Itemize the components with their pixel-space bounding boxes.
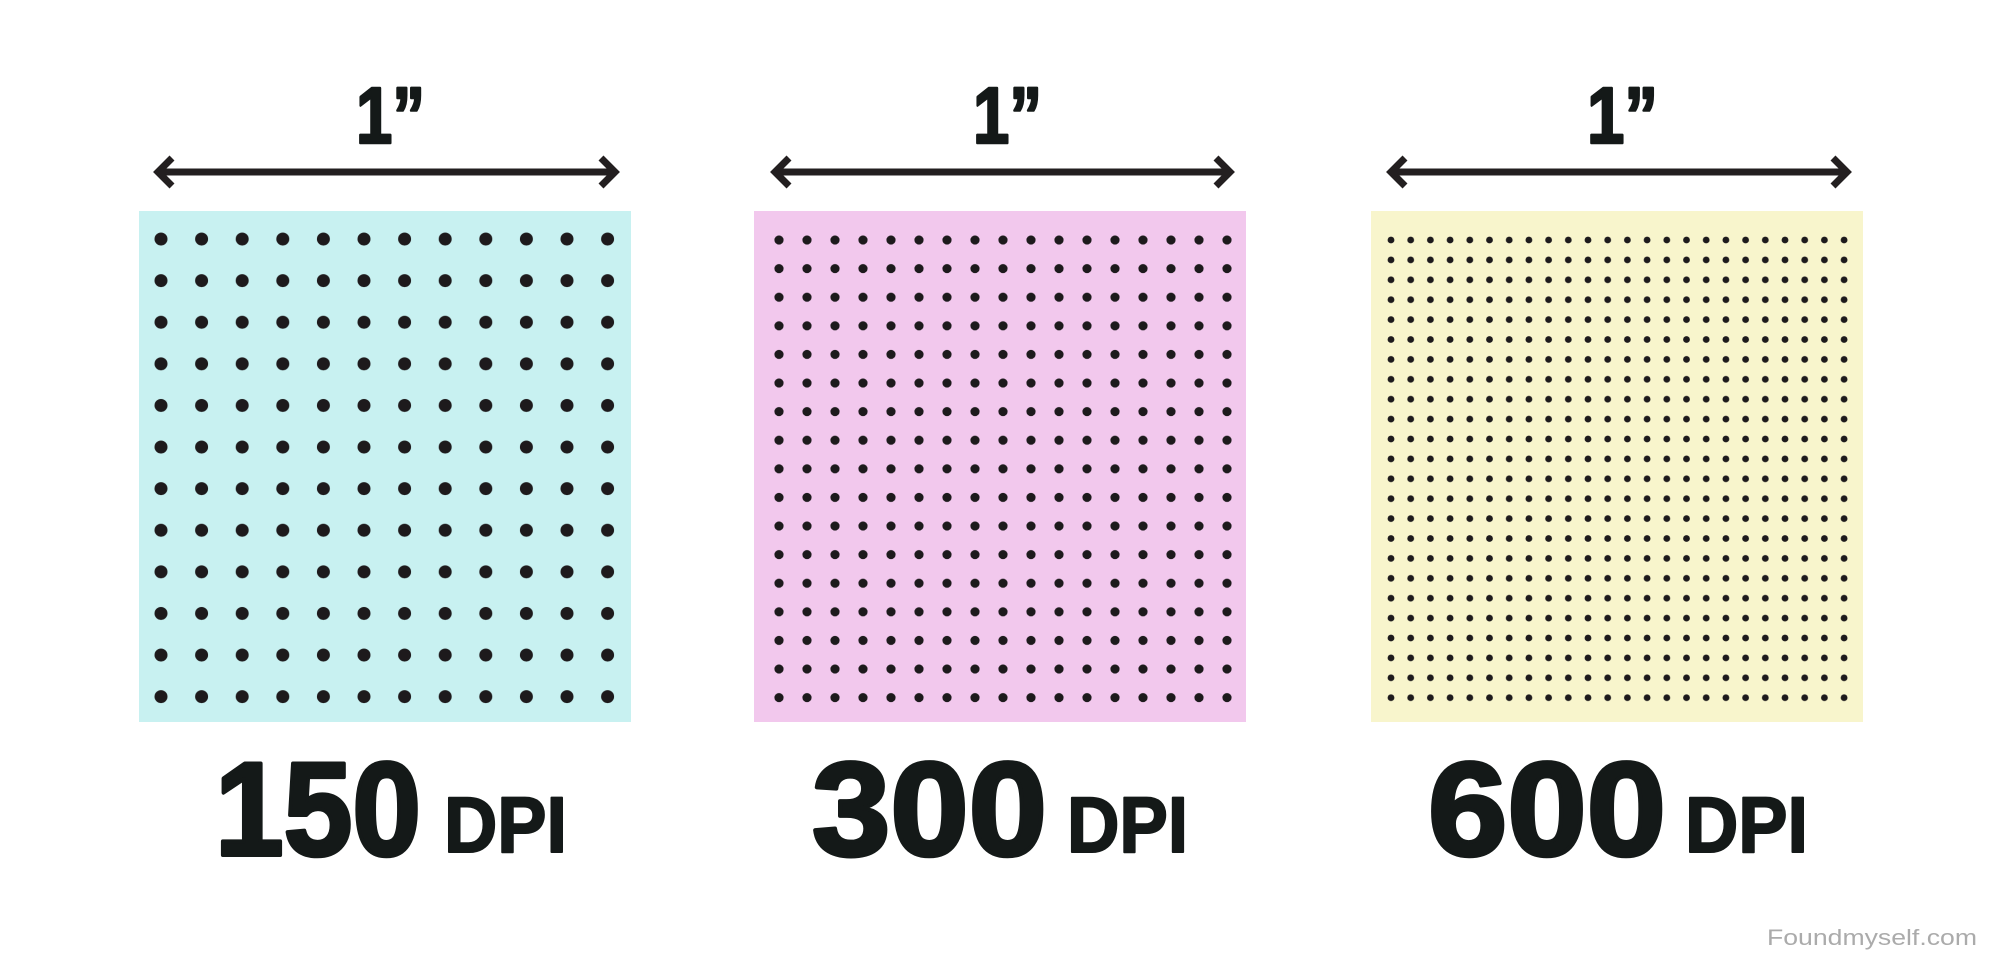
panel: 300 DPI bbox=[754, 71, 1246, 884]
label: 300 DPI: 300 bbox=[812, 736, 1047, 884]
arrow: 1 inch width bbox=[158, 158, 615, 186]
label: 600 DPI bbox=[1428, 736, 1808, 884]
label: 1 inch: 1” bbox=[356, 71, 425, 160]
arrow: 1 inch width bbox=[775, 158, 1230, 186]
label: 1 inch: 1” bbox=[973, 71, 1042, 160]
label: 300 DPI: DPI bbox=[1067, 780, 1188, 869]
dot grid: yellow bbox=[1371, 211, 1863, 722]
watermark: Foundmyself.com bbox=[1767, 925, 1977, 950]
label: 1 inch: 1” bbox=[1587, 71, 1658, 160]
label: 150 DPI: 150 bbox=[215, 736, 421, 884]
label: 600 DPI: DPI bbox=[1685, 780, 1808, 869]
arrow: 1 inch width bbox=[1391, 158, 1847, 186]
panel: 150 DPI bbox=[139, 71, 631, 884]
label: 600 DPI: 600 bbox=[1428, 736, 1666, 884]
label: 300 DPI bbox=[812, 736, 1188, 884]
dot grid: pink bbox=[754, 211, 1246, 722]
label: 150 DPI bbox=[215, 736, 567, 884]
panel: 600 DPI bbox=[1371, 71, 1863, 884]
dot grid: cyan bbox=[139, 211, 631, 722]
label: 150 DPI: DPI bbox=[444, 780, 567, 869]
